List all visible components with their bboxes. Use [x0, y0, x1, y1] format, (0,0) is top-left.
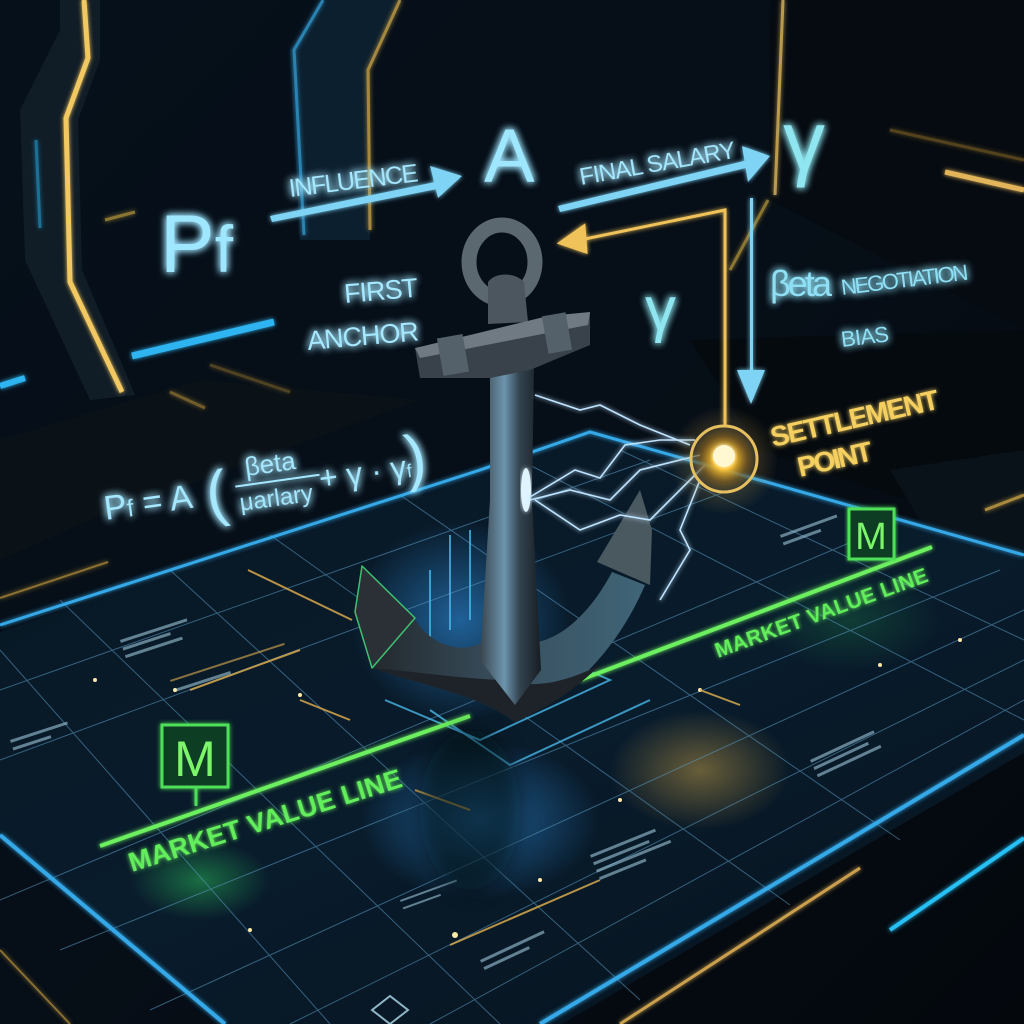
anchor [355, 225, 652, 890]
label: market value line left: MARKET VALUE LINE [125, 763, 406, 878]
icon: M marker right: M [855, 516, 887, 558]
shank spark [521, 468, 531, 512]
formula: ( [201, 458, 232, 529]
anchor stock [415, 312, 590, 378]
label: negotiation bias [840, 260, 970, 352]
label: first anchor: ANCHOR [306, 316, 420, 356]
label: final salary: FINAL SALARY [577, 137, 738, 191]
symbol gamma middle: γ [645, 275, 676, 344]
formula: μarlary [238, 480, 315, 517]
wall light strips [0, 0, 1024, 598]
anchor arm underside [372, 665, 600, 722]
anchor arms [372, 572, 645, 722]
floor nodes [93, 638, 962, 938]
left fluke [355, 566, 415, 668]
formula: βeta [243, 445, 298, 482]
floor gold traces [190, 570, 740, 945]
formula: ) [400, 422, 430, 493]
symbol A: A [484, 114, 535, 199]
label: market value line right: MARKET VALUE LINE [712, 564, 931, 663]
anchor shackle [488, 274, 528, 324]
stock band left [437, 334, 469, 376]
arrow: influence [270, 166, 462, 222]
icon: hologram square [372, 996, 408, 1024]
label: beta: βeta [770, 263, 833, 304]
anchor shank [480, 368, 541, 705]
anchor stock highlight [415, 312, 590, 358]
icon: M marker left: M [174, 731, 216, 787]
settlement orb [669, 405, 779, 515]
label: first anchor: FIRST [343, 273, 419, 309]
anchor shadow [420, 730, 520, 890]
label: negotiation bias: NEGOTIATION [840, 260, 970, 300]
label: settlement point: SETTLEMENT [767, 384, 942, 453]
stock band right [542, 312, 572, 354]
right fluke [597, 490, 652, 585]
anchor ring [469, 225, 535, 299]
label: settlement point: POINT [794, 436, 875, 483]
floor panel [0, 432, 1024, 1024]
label: settlement point [767, 384, 942, 483]
icon: M marker left [162, 725, 228, 806]
market value line [100, 547, 932, 878]
arrow: yellow feedback [560, 210, 725, 425]
symbol gamma top: γ [783, 94, 825, 188]
label: influence: INFLUENCE [287, 159, 420, 203]
icon: M marker right [849, 509, 894, 559]
panel border [0, 432, 1024, 1024]
floor grid [0, 450, 1024, 1024]
lightning [530, 395, 705, 600]
formula [98, 422, 432, 544]
formula: + γ · γf [317, 448, 415, 497]
arrow: final salary [558, 146, 770, 212]
formula symbol Pf: Pf [160, 199, 234, 290]
hologram circuit under anchor [385, 530, 650, 765]
floor data marks [10, 514, 881, 970]
label: first anchor [306, 273, 420, 356]
arrow: beta down [737, 198, 765, 404]
formula: Pf = A [102, 478, 195, 528]
label: negotiation bias: BIAS [840, 321, 890, 352]
